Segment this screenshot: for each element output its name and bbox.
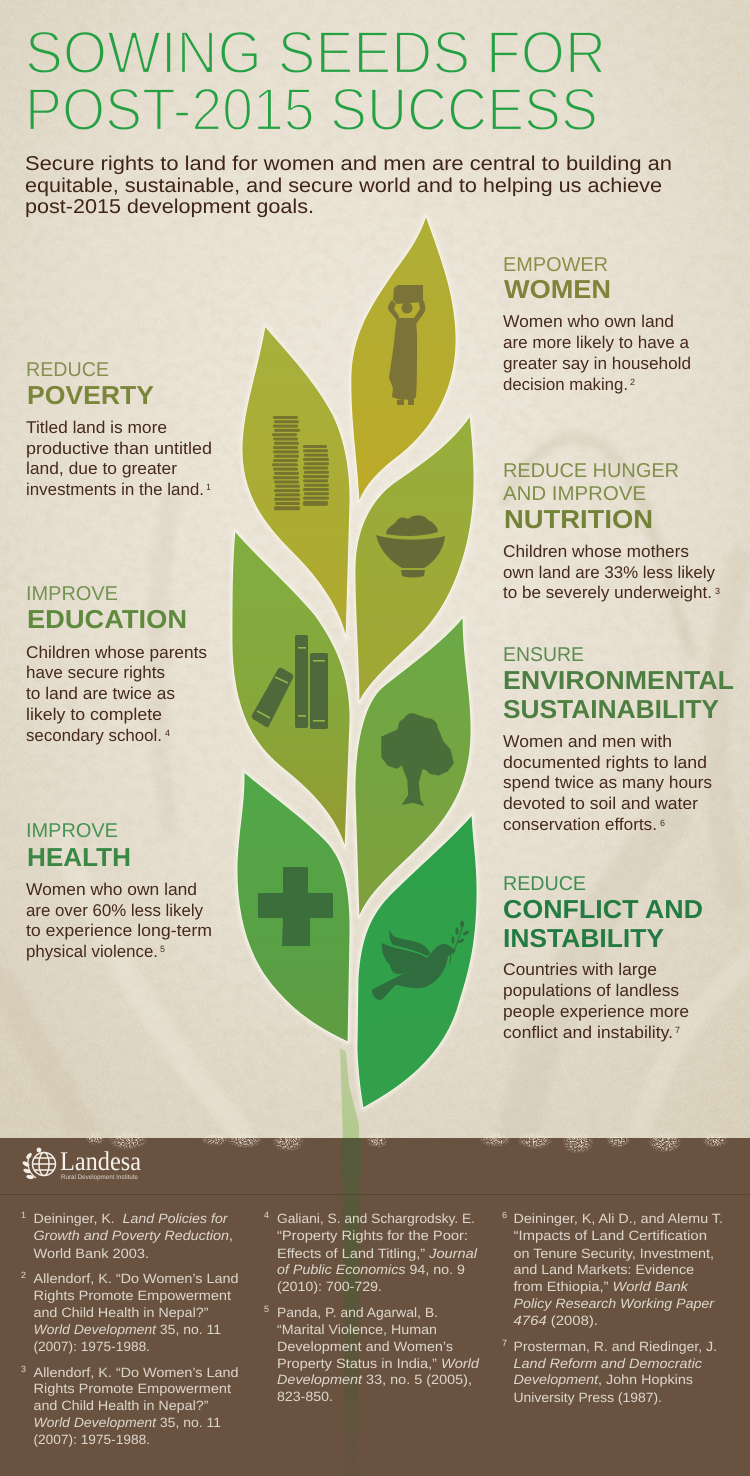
heading: WOMEN [504,274,611,304]
reference 4: (2010): 700-729. [277,1279,382,1294]
footnotes column 2 [264,1210,480,1404]
text block: 4 [165,728,170,738]
text block: 1 [206,482,211,492]
icon: coin stacks [272,416,329,510]
leaf: environmental sustainability [355,617,471,917]
soil footer band [0,1138,750,1476]
footnotes column 1 [21,1210,239,1447]
text block [26,880,212,961]
reference 7: University Press (1987). [514,1390,662,1405]
text block: Women who own land [26,880,197,899]
text block: people experience more [503,1002,689,1021]
reference 5 [264,1304,480,1404]
reference 2: (2007): 1975-1988. [34,1339,150,1354]
reference 3: 3 [21,1364,26,1374]
text block: to experience long-term [26,921,212,940]
heading: INSTABILITY [503,923,664,953]
icon: bowl of food [376,515,445,578]
icon: dove with olive branch [372,920,470,1000]
reference 5: “Marital Violence, Human [277,1322,437,1337]
text block: decision making. [503,375,628,394]
reference 7: Prosterman, R. and Riedinger, J. [514,1339,717,1354]
heading [26,820,131,872]
reference 4 [264,1210,478,1294]
heading [503,460,679,534]
reference 3: (2007): 1975-1988. [34,1432,150,1447]
reference 2: Allendorf, K. “Do Women’s Land [34,1271,239,1286]
text block [26,643,207,745]
reference 6: “Impacts of Land Certification [514,1228,707,1243]
reference 6: 6 [502,1210,507,1220]
text block: are over 60% less likely [26,901,203,920]
reference 5: Property Status in India,” World [277,1356,480,1371]
paper background [0,0,750,1140]
soil speckled edge [85,1130,728,1154]
footnotes column 3 [502,1210,723,1405]
reference 4: 4 [264,1210,269,1220]
icon: medical cross [258,867,333,946]
text block: to land are twice as [26,684,175,703]
reference 4: Effects of Land Titling,” Journal [277,1246,478,1261]
text block: physical violence. [26,942,158,961]
text block: Children whose parents [26,643,207,662]
heading [503,873,703,953]
text block: 3 [715,586,720,596]
heading: REDUCE HUNGER [503,460,679,482]
reference 4: “Property Rights for the Poor: [277,1228,468,1243]
reference 2: and Child Health in Nepal?” [34,1305,208,1320]
text block: Countries with large [503,960,657,979]
background grass shapes [0,439,750,1135]
text block: devoted to soil and water [503,794,698,813]
panel: reduce hunger and improve nutrition [503,460,720,602]
reference 1: Deininger, K. Land Policies for [34,1211,228,1226]
text block: greater say in household [503,354,691,373]
reference 6: on Tenure Security, Investment, [514,1246,714,1261]
reference 6: Policy Research Working Paper [514,1296,715,1311]
icon: globe with leaves [22,1148,55,1180]
leaf: empower women [351,216,456,502]
logo: Landesa [22,1146,141,1181]
panel: ensure environmental sustainability [503,644,734,834]
text block: investments in the land. [26,480,204,499]
text block: 7 [675,1025,680,1035]
footer divider [0,1194,750,1195]
text block: Children whose mothers [503,542,689,561]
panel: reduce conflict and instability [503,873,703,1042]
reference 3: and Child Health in Nepal?” [34,1398,208,1413]
reference 7: 7 [502,1338,507,1348]
heading: ENVIRONMENTAL [503,665,734,695]
reference 7 [502,1338,717,1405]
text block: Women who own land [503,312,674,331]
reference 5: 5 [264,1304,269,1314]
text block: 6 [660,818,665,828]
text block: Women and men with [503,732,672,751]
text block: documented rights to land [503,753,707,772]
title: POST-2015 SUCCESS [25,76,598,143]
text block: productive than untitled [26,439,212,458]
heading: EDUCATION [27,604,187,634]
leaf: reduce hunger [355,416,474,702]
reference 1: World Bank 2003. [34,1246,149,1261]
text block: secondary school. [26,726,162,745]
leaf: improve health [237,772,350,1042]
text block: 5 [160,944,165,954]
reference 1: 1 [21,1210,26,1220]
text block [26,418,212,499]
text block: land, due to greater [26,459,177,478]
logo: Landesa: Rural Development Institute [61,1174,138,1181]
reference 1 [21,1210,233,1261]
text block: populations of landless [503,981,679,1000]
text block: 2 [630,377,635,387]
panel: improve education [26,583,207,745]
reference 2: World Development 35, no. 11 [34,1322,221,1337]
text block [503,960,689,1042]
text block: conservation efforts. [503,815,657,834]
reference 6: and Land Markets: Evidence [514,1262,694,1277]
reference 6: from Ethiopia,” World Bank [514,1279,689,1294]
title [29,32,602,130]
heading [26,359,154,410]
reference 2 [21,1270,239,1354]
heading: NUTRITION [504,504,653,534]
title: SOWING SEEDS FOR [25,19,606,86]
text block: Titled land is more [26,418,167,437]
text block [503,732,712,834]
heading: CONFLICT AND [503,894,703,924]
text block [503,542,720,602]
icon: woman carrying load [388,285,425,405]
heading: IMPROVE [26,820,118,842]
leaf: improve education [232,531,350,847]
heading: POVERTY [27,380,154,410]
text block [503,312,691,394]
panel: reduce poverty [26,359,212,499]
intro text: equitable, sustainable, and secure world and to helping us achieve [25,175,662,197]
heading: ENSURE [503,644,584,666]
plant stem below ground [342,1138,361,1476]
leaf: reduce conflict [357,815,477,1108]
intro text [25,153,672,218]
text block: are more likely to have a [503,333,690,352]
heading: AND IMPROVE [503,483,646,505]
heading: REDUCE [26,359,109,381]
logo: Landesa: Landesa [60,1146,141,1176]
panel: improve health [26,820,212,961]
text block: to be severely underweight. [503,583,712,602]
plant stem above ground [340,1048,359,1140]
heading [26,583,187,634]
leaf: reduce poverty [242,326,350,638]
text block: spend twice as many hours [503,773,712,792]
reference 5: Panda, P. and Agarwal, B. [277,1305,438,1320]
reference 1: Growth and Poverty Reduction , [34,1228,233,1243]
intro text: Secure rights to land for women and men are central to building an [25,153,672,175]
icon: tree [382,714,453,805]
reference 4: Galiani, S. and Schargrodsky. E. [277,1211,475,1226]
reference 5: Development 33, no. 5 (2005), [277,1372,472,1387]
reference 3: Rights Promote Empowerment [34,1381,231,1396]
reference 2: Rights Promote Empowerment [34,1288,231,1303]
reference 4: of Public Economics 94, no. 9 [277,1262,465,1277]
heading: SUSTAINABILITY [503,694,719,724]
heading: IMPROVE [26,583,118,605]
text block: own land are 33% less likely [503,563,715,582]
heading [503,644,734,724]
text block: conflict and instability. [503,1023,673,1042]
heading: REDUCE [503,873,586,895]
heading: HEALTH [27,842,131,872]
reference 6: Deininger, K, Ali D., and Alemu T. [514,1211,723,1226]
text block: have secure rights [26,663,165,682]
reference 3: World Development 35, no. 11 [34,1415,221,1430]
heading: EMPOWER [503,254,608,276]
reference 6 [502,1210,723,1328]
panel: empower women [503,254,691,394]
reference 3: Allendorf, K. “Do Women’s Land [34,1365,239,1380]
icon: books [252,635,328,729]
reference 2: 2 [21,1270,26,1280]
heading [503,254,611,304]
text block: likely to complete [26,705,162,724]
reference 6: 4764 (2008). [514,1313,598,1328]
intro text: post-2015 development goals. [25,196,314,218]
paper texture [0,0,750,1138]
reference 5: Development and Women’s [277,1339,453,1354]
reference 5: 823-850. [277,1389,333,1404]
reference 3 [21,1364,239,1447]
leaf halo [232,216,477,1108]
reference 7: Land Reform and Democratic [514,1356,702,1371]
reference 7: Development , John Hopkins [514,1372,693,1387]
